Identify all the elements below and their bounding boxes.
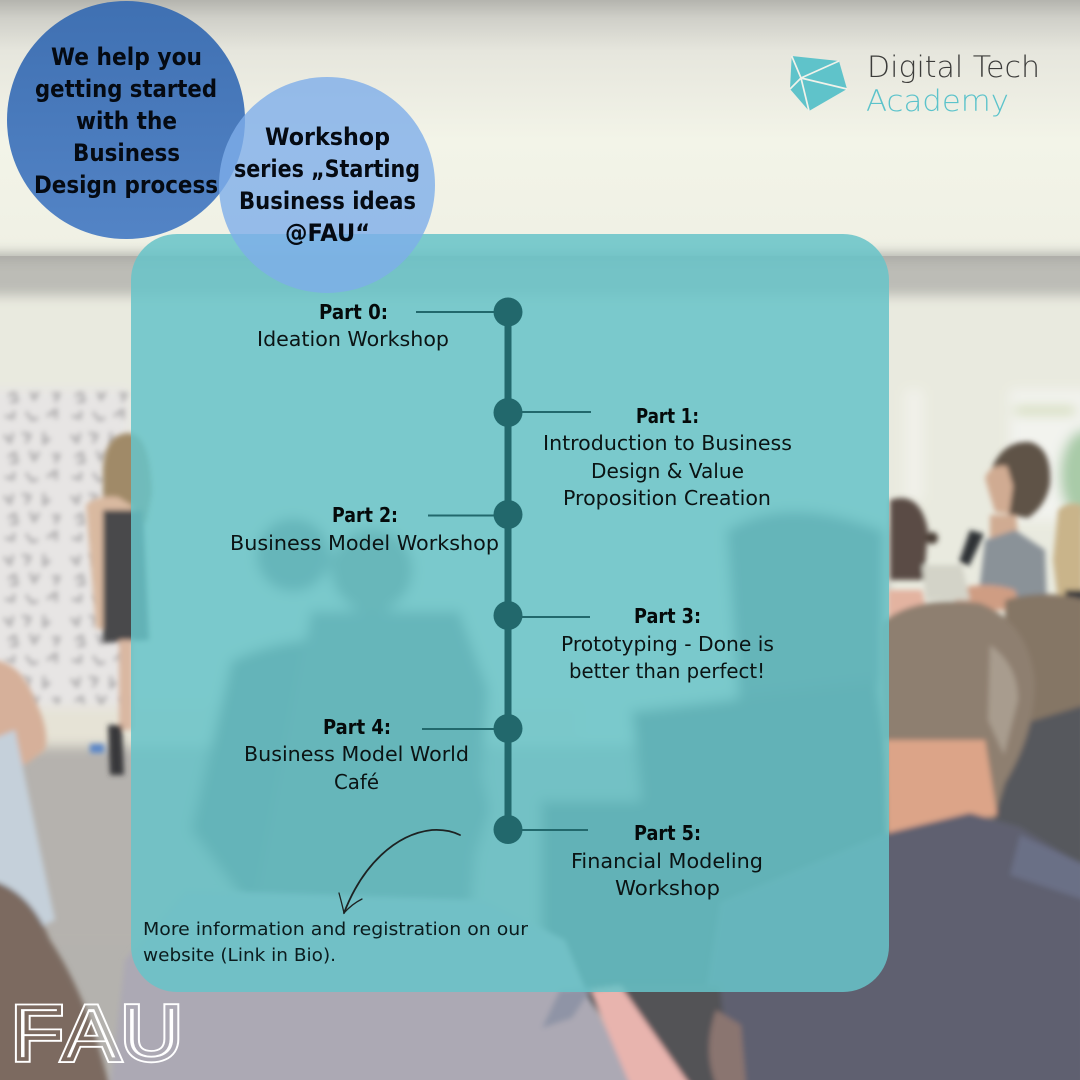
circle: Workshop series: Business ideas — [239, 187, 416, 215]
text: more information — [143, 919, 529, 966]
circle: We help you — [7, 1, 245, 239]
circle: Workshop series: Workshop — [265, 123, 390, 151]
wordmark — [866, 50, 1040, 118]
text: more information: More information and registration on our — [143, 919, 529, 940]
panel: timeline card — [131, 234, 889, 992]
timeline — [416, 298, 591, 844]
circle: Workshop series — [219, 77, 435, 293]
circle: We help you: with the — [76, 107, 177, 135]
logo: FAU — [14, 1003, 180, 1064]
text: Part 2: Business Model Workshop — [230, 531, 499, 555]
circle: We help you: Design process — [34, 171, 218, 199]
circle: We help you: Business — [73, 139, 180, 167]
right side people — [988, 442, 1050, 518]
text: Part 4 — [244, 715, 469, 794]
logo: Digital Tech Academy — [790, 50, 1040, 118]
text: Part 1: Proposition Creation — [563, 486, 771, 510]
foreground left person — [0, 660, 46, 765]
text: Part 5: Financial Modeling — [571, 849, 763, 873]
wordmark: Digital Tech — [867, 50, 1040, 84]
circle: Workshop series: @FAU“ — [285, 219, 370, 247]
text: Part 1: Introduction to Business — [543, 431, 792, 455]
text: Part 4: Café — [334, 770, 379, 794]
text: Part 3: Part 3: — [634, 604, 701, 628]
wordmark: Academy — [866, 84, 1009, 118]
text: more information: website (Link in Bio). — [143, 945, 336, 966]
text: Part 0: Part 0: — [319, 300, 388, 324]
text: Part 3 — [561, 604, 774, 683]
text: Part 2 — [230, 503, 499, 555]
text: Part 5: Part 5: — [634, 821, 701, 845]
text: Part 1 — [543, 404, 792, 510]
icon: faceted gem — [790, 56, 847, 111]
foreground right people — [1005, 594, 1080, 750]
woman at whiteboard — [103, 433, 152, 523]
arrow: hand-drawn pointer to website note — [339, 830, 460, 913]
text: Part 4: Part 4: — [323, 715, 391, 739]
text: Part 1: Design & Value — [591, 459, 744, 483]
text: Part 3: better than perfect! — [569, 659, 765, 683]
text: Part 3: Prototyping - Done is — [561, 632, 774, 656]
text: Part 2: Part 2: — [332, 503, 398, 527]
circle: We help you: We help you — [51, 43, 202, 71]
text: Part 5: Workshop — [615, 876, 720, 900]
text: Part 0 — [257, 300, 449, 351]
circle: Workshop series: series „Starting — [234, 155, 420, 183]
text: Part 1: Part 1: — [636, 404, 699, 428]
text: Part 5 — [571, 821, 763, 900]
circle: We help you: getting started — [35, 75, 217, 103]
text: Part 4: Business Model World — [244, 742, 469, 766]
room people — [190, 638, 490, 910]
text: Part 0: Ideation Workshop — [257, 327, 449, 351]
